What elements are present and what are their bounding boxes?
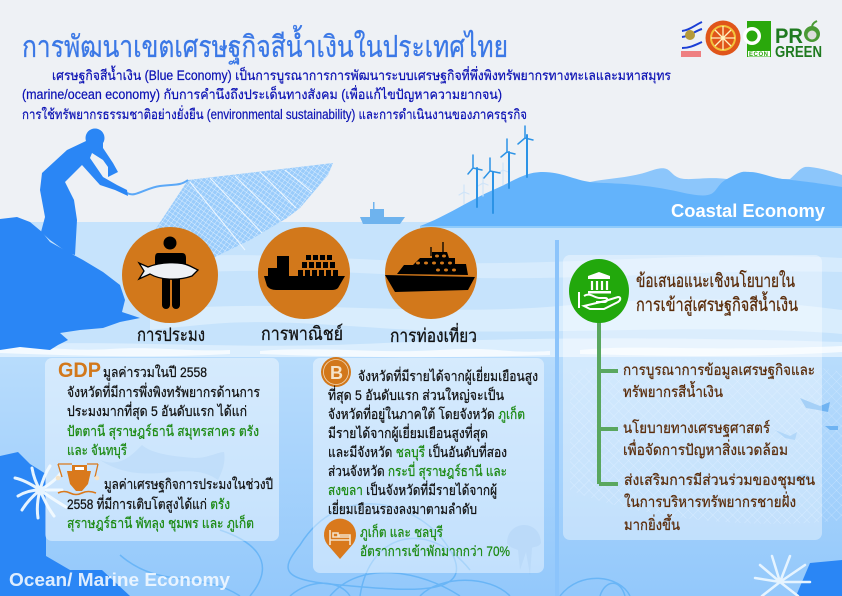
policy heading	[636, 270, 798, 316]
policy item 3	[624, 472, 815, 534]
right reef	[796, 560, 842, 596]
panel: tourism income	[313, 357, 544, 573]
growth text: มูลค่าเศรษฐกิจการประมงในช่วงปี	[104, 476, 273, 493]
logo: econ	[743, 21, 771, 58]
coastal economy label: Coastal Economy	[671, 201, 825, 221]
wind turbines	[459, 126, 533, 213]
logos	[681, 20, 822, 61]
trade icon	[258, 227, 350, 319]
sea anemone right	[755, 556, 810, 596]
GDP text: มูลค่ารวมในปี 2558	[103, 364, 207, 381]
growth text	[67, 476, 273, 532]
occupancy text: อัตราการเข้าพักมากกว่า 70%	[360, 543, 510, 559]
policy item 3: ส่งเสริมการมีส่วนร่วมของชุมชน	[624, 472, 815, 490]
GDP text: ปัตตานี สุราษฎร์ธานี สมุทรสาคร ตรัง	[67, 423, 259, 440]
panel: policy recommendations	[563, 255, 822, 540]
logo: university seal	[706, 20, 740, 56]
logo: pro green: PR	[775, 25, 803, 48]
jellyfish silhouette	[507, 525, 541, 575]
policy heading: การเข้าสู่เศรษฐกิจสีน้ำเงิน	[636, 291, 798, 316]
connector lines	[599, 320, 618, 484]
growth text: 2558 ที่มีการเติบโตสูงได้แก่ ตรัง	[67, 495, 230, 513]
income text: จังหวัดที่อยู่ในภาคใต้ โดยจังหวัด ภูเก็ต	[328, 405, 525, 423]
policy item 3: ในการบริหารทรัพยากรชายฝั่ง	[624, 491, 796, 511]
policy item 2	[623, 419, 788, 459]
policy item 1: การบูรณาการข้อมูลเศรษฐกิจและ	[623, 362, 815, 379]
GDP text: และ จันทบุรี	[67, 442, 127, 459]
income text: และมีจังหวัด ชลบุรี เป็นอันดับที่สอง	[328, 443, 507, 461]
intro text: การใช้ทรัพยากรธรรมชาติอย่างยั่งยืน (environmental sustainability) และการดำเนินงานของภาครธุรกิจ	[22, 105, 527, 123]
title: การพัฒนาเขตเศรษฐกิจสีน้ำเงินในประเทศไทย	[22, 25, 508, 65]
left reef	[0, 452, 130, 596]
fish school	[775, 398, 838, 482]
policy item 2: เพื่อจัดการปัญหาสิ่งแวดล้อม	[623, 439, 788, 459]
GDP text: จังหวัดที่มีการพึ่งพิงทรัพยากรด้านการ	[67, 383, 260, 400]
icon: coin	[321, 357, 351, 387]
label: fishery: การประมง	[137, 324, 205, 345]
logo: pro green	[775, 21, 822, 61]
GDP heading: GDP	[58, 359, 101, 382]
income text	[328, 367, 538, 517]
icon: bank in hand	[569, 259, 629, 323]
cast net	[127, 163, 333, 258]
income text: ส่วนจังหวัด กระบี่ สุราษฎร์ธานี และ	[328, 462, 507, 480]
logo: econ: ECON	[749, 52, 768, 58]
intro text	[22, 65, 671, 123]
income text: สงขลา เป็นจังหวัดที่มีรายได้จากผู้	[328, 481, 497, 499]
icon: hotel pin	[324, 519, 356, 559]
background: sky	[0, 0, 842, 224]
policy item 1: ทรัพยากรสีน้ำเงิน	[623, 381, 723, 401]
fishing boat	[360, 202, 405, 224]
sea anemone left	[15, 466, 66, 518]
background: coastal water	[0, 222, 842, 358]
rock	[0, 217, 140, 350]
policy item 2: นโยบายทางเศรษฐศาสตร์	[623, 419, 770, 437]
fishery icon	[122, 227, 218, 323]
jellyfish tangle	[120, 504, 630, 596]
policy item 1	[623, 362, 815, 401]
whale silhouette	[100, 445, 225, 480]
GDP text	[67, 364, 260, 459]
intro text: (marine/ocean economy) กับการคำนึงถึงประเด็นทางสังคม (เพื่อแก้ไขปัญหาความยากจน)	[22, 85, 502, 102]
fishing net underwater	[570, 359, 842, 524]
occupancy text	[360, 523, 510, 559]
occupancy text: ภูเก็ต และ ชลบุรี	[360, 523, 443, 541]
tourism icon	[385, 227, 477, 319]
income text: จังหวัดที่มีรายได้จากผู้เยี่ยมเยือนสูง	[358, 367, 538, 385]
icon: coin: B	[330, 363, 343, 383]
background: ocean	[0, 240, 842, 596]
GDP text: ประมงมากที่สุด 5 อันดับแรก ได้แก่	[67, 402, 247, 420]
growth text: สุราษฎร์ธานี พัทลุง ชุมพร และ ภูเก็ต	[67, 514, 254, 532]
income text: มีรายได้จากผู้เยี่ยมเยือนสูงที่สุด	[328, 424, 488, 442]
label: tourism: การท่องเที่ยว	[390, 323, 477, 346]
income text: ที่สุด 5 อันดับแรก ส่วนใหญ่จะเป็น	[328, 386, 504, 404]
coastal mountains	[420, 167, 842, 228]
intro text: เศรษฐกิจสีน้ำเงิน (Blue Economy) เป็นการบูรณาการการพัฒนาระบบเศรษฐกิจที่พึ่งพิงทรัพยากรทางทะเลและมหาสมุทร	[52, 65, 671, 84]
fisherman	[40, 128, 128, 255]
panel: fishery GDP	[45, 358, 279, 541]
ocean economy label: Ocean/ Marine Economy	[9, 570, 230, 590]
income text: เยี่ยมเยือนรองลงมาตามลำดับ	[328, 500, 477, 517]
label: trade: การพาณิชย์	[261, 323, 343, 344]
logo: blue waves	[681, 22, 702, 57]
icon: fishing boat	[56, 464, 99, 494]
policy item 3: มากยิ่งขึ้น	[624, 514, 680, 534]
logo: pro green: GREEN	[775, 44, 822, 61]
